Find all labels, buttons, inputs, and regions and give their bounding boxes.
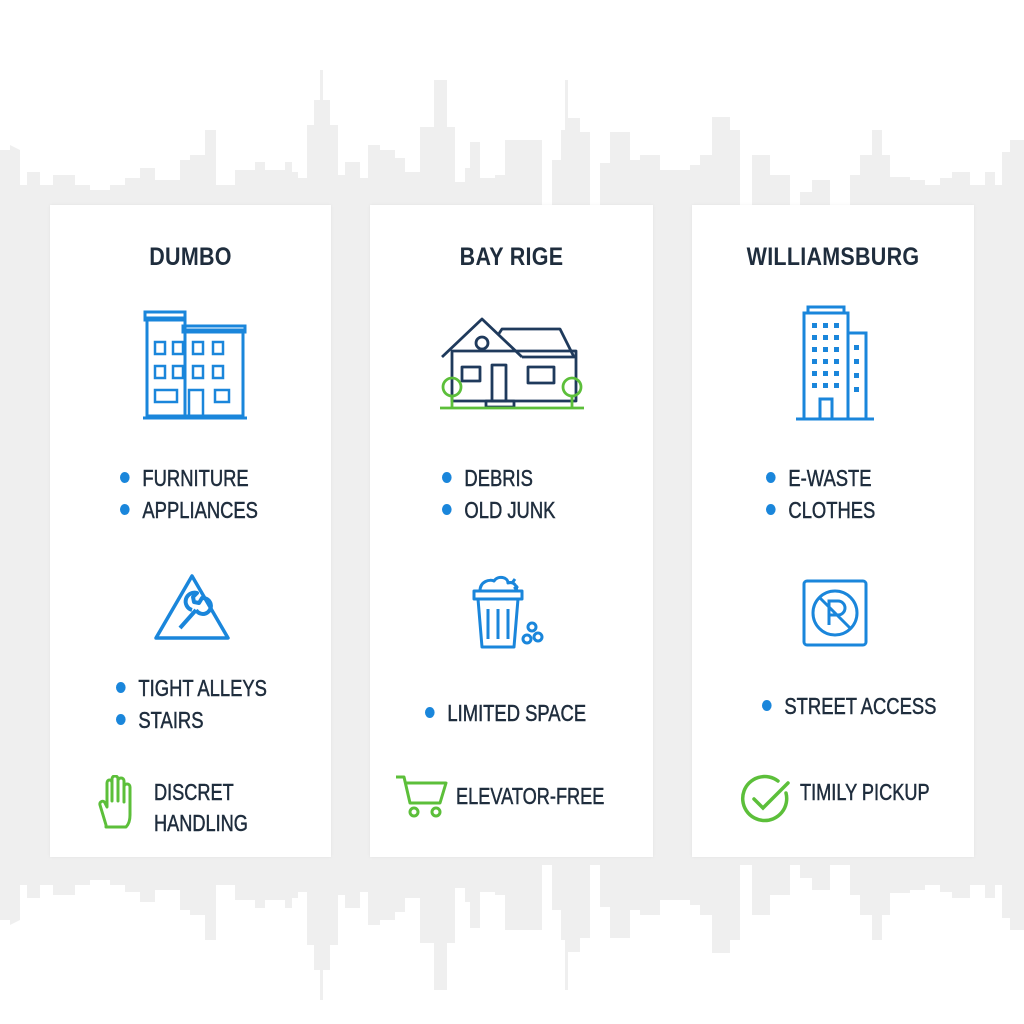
- list: items: OLD JUNK: [464, 497, 555, 523]
- list: challenges: STAIRS: [138, 707, 204, 733]
- panel: DUMBO: [50, 205, 331, 857]
- icon: check circle: [740, 774, 790, 822]
- heading: BAY RIGE: [460, 243, 563, 271]
- list: challenges: [116, 675, 267, 733]
- panel: BAY RIGE: [370, 205, 653, 857]
- text: discret handling: DISCRET: [154, 779, 234, 805]
- icon: cart: [396, 776, 448, 818]
- text: discret handling: HANDLING: [154, 810, 248, 836]
- list: items: E-WASTE: [788, 465, 872, 491]
- icon: hand: [98, 775, 132, 828]
- text: discret handling: [154, 779, 248, 836]
- heading: WILLIAMSBURG: [747, 243, 919, 271]
- icon: warning wrench: [154, 574, 230, 640]
- list: challenges: LIMITED SPACE: [447, 700, 586, 726]
- text: timily pickup: TIMILY PICKUP: [800, 779, 930, 805]
- icon: office building: [143, 310, 247, 420]
- list: items: DEBRIS: [464, 465, 533, 491]
- icon: house: [440, 318, 584, 410]
- list: items: [442, 465, 556, 523]
- heading: DUMBO: [149, 243, 232, 271]
- text: elevator-free: ELEVATOR-FREE: [456, 783, 604, 809]
- list: challenges: TIGHT ALLEYS: [138, 675, 267, 701]
- list: items: CLOTHES: [788, 497, 875, 523]
- list: items: APPLIANCES: [142, 497, 258, 523]
- icon: no parking: [802, 580, 868, 646]
- icon: trash can: [472, 576, 544, 648]
- panel: WILLIAMSBURG: [692, 205, 974, 857]
- list: items: [120, 465, 258, 523]
- list: challenges: STREET ACCESS: [784, 693, 936, 719]
- icon: tower: [796, 306, 874, 420]
- list: items: [766, 465, 875, 523]
- list: items: FURNITURE: [142, 465, 249, 491]
